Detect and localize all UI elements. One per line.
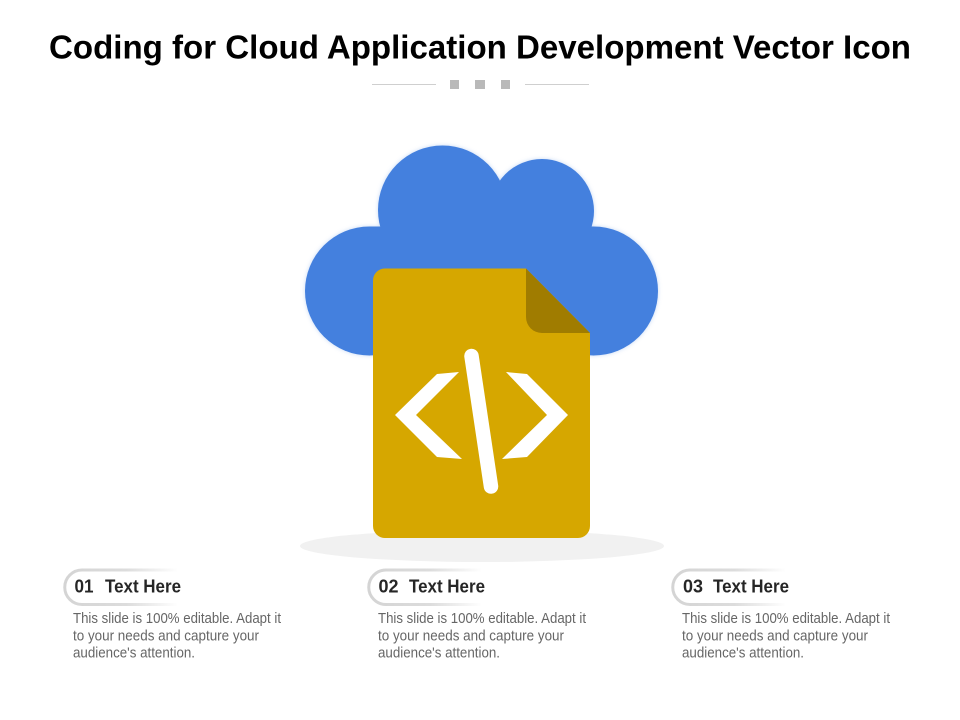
heading: 01 — [74, 576, 94, 596]
code symbol — [395, 356, 568, 486]
heading: Text Here — [409, 576, 485, 596]
body text: to your needs and capture your — [73, 628, 259, 644]
body text: audience's attention. — [378, 644, 500, 662]
ground shadow — [300, 530, 664, 562]
heading: Text Here — [713, 576, 789, 596]
icon: code document — [373, 268, 590, 538]
heading: 03 — [683, 576, 703, 596]
title divider — [372, 80, 589, 89]
body text: This slide is 100% editable. Adapt it — [378, 610, 587, 627]
body text: This slide is 100% editable. Adapt it — [73, 610, 282, 627]
folded corner — [526, 268, 590, 333]
pill outline — [673, 570, 786, 604]
heading: 02 — [378, 576, 398, 596]
icon: cloud — [305, 146, 658, 356]
heading: Text Here — [105, 576, 181, 596]
panel: item 01 — [65, 570, 282, 662]
body text: to your needs and capture your — [682, 628, 868, 644]
body text: to your needs and capture your — [378, 628, 564, 644]
body text: audience's attention. — [682, 644, 804, 662]
body text: audience's attention. — [73, 644, 195, 662]
title: Coding for Cloud Application Development Vector Icon — [49, 28, 911, 66]
document page — [373, 268, 590, 538]
body text: This slide is 100% editable. Adapt it — [682, 610, 891, 627]
panel: item 02 — [369, 570, 587, 662]
pill outline — [65, 570, 178, 604]
body text — [682, 610, 891, 662]
panel: item 03 — [673, 570, 891, 662]
body text — [73, 610, 282, 662]
body text — [378, 610, 587, 662]
pill outline — [369, 570, 482, 604]
